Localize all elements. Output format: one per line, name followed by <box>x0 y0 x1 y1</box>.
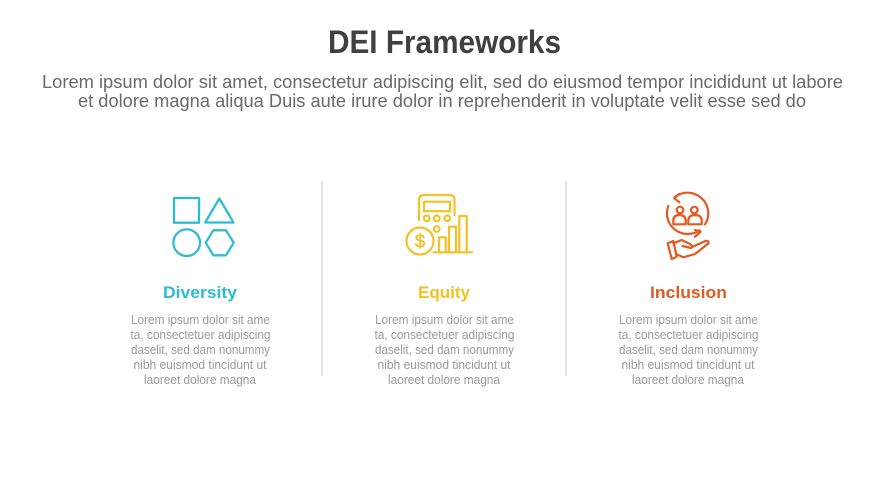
text block: inclusion: laoreet dolore magna <box>632 373 744 387</box>
text block: diversity: laoreet dolore magna <box>144 373 256 387</box>
text block: equity <box>374 313 515 387</box>
icon: geometric shapes <box>173 198 234 256</box>
panel: diversity <box>130 198 271 387</box>
text block: equity: Lorem ipsum dolor sit ame <box>375 313 514 327</box>
text block: diversity <box>130 313 271 387</box>
icon: people in cycle above open hand <box>667 193 709 259</box>
icon: calculator, coin and bar chart <box>406 195 472 254</box>
text block: diversity: Lorem ipsum dolor sit ame <box>131 313 270 327</box>
text block: diversity: daselit, sed dam nonummy <box>131 343 271 357</box>
text block: inclusion: daselit, sed dam nonummy <box>619 343 759 357</box>
heading: inclusion: Inclusion <box>650 283 727 302</box>
text block: equity: daselit, sed dam nonummy <box>375 343 515 357</box>
text block: equity: ta, consectetuer adipiscing <box>374 328 515 342</box>
subtitle: et dolore magna aliqua Duis aute irure dolor in reprehenderit in voluptate velit esse sed do <box>78 90 806 111</box>
subtitle: Lorem ipsum dolor sit amet, consectetur adipiscing elit, sed do eiusmod tempor incididunt ut labore <box>42 71 843 92</box>
heading: diversity: Diversity <box>163 283 238 302</box>
text block: equity: laoreet dolore magna <box>388 373 500 387</box>
icon: dollar sign: $ <box>415 230 425 252</box>
panel: inclusion <box>618 193 759 387</box>
text block: diversity: ta, consectetuer adipiscing <box>130 328 271 342</box>
text block: inclusion <box>618 313 759 387</box>
panel: equity <box>374 195 515 387</box>
text block: inclusion: Lorem ipsum dolor sit ame <box>619 313 758 327</box>
text block: equity: nibh euismod tincidunt ut <box>378 358 511 372</box>
text block: inclusion: ta, consectetuer adipiscing <box>618 328 759 342</box>
subtitle <box>42 71 843 111</box>
text block: inclusion: nibh euismod tincidunt ut <box>622 358 755 372</box>
heading: equity: Equity <box>418 283 471 302</box>
text block: diversity: nibh euismod tincidunt ut <box>134 358 267 372</box>
title: DEI Frameworks <box>328 24 561 60</box>
